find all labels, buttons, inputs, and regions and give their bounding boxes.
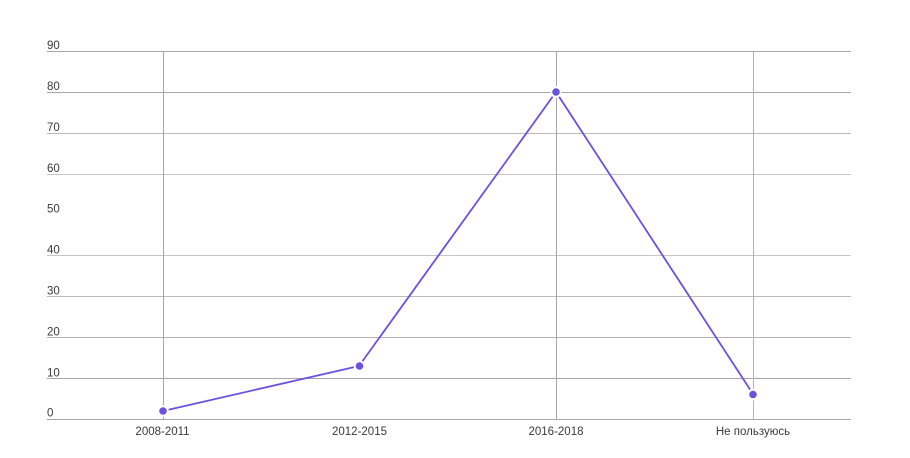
y axis labels: 50	[47, 204, 60, 216]
x axis labels	[135, 426, 790, 438]
y axis labels: 60	[47, 163, 60, 175]
y axis labels: 0	[47, 408, 53, 420]
x axis labels: Не пользуюсь	[716, 426, 790, 438]
y axis labels	[47, 40, 60, 420]
x axis labels: 2016-2018	[528, 426, 584, 438]
y axis labels: 90	[47, 40, 60, 52]
y axis labels: 40	[47, 244, 60, 256]
data line	[163, 92, 753, 411]
y axis labels: 30	[47, 286, 60, 298]
y axis labels: 80	[47, 81, 60, 93]
x axis labels: 2012-2015	[332, 426, 387, 438]
y axis labels: 20	[47, 326, 60, 338]
data points	[158, 87, 758, 416]
y axis labels: 10	[47, 368, 60, 380]
y axis labels: 70	[47, 122, 60, 134]
x axis labels: 2008-2011	[135, 426, 190, 438]
